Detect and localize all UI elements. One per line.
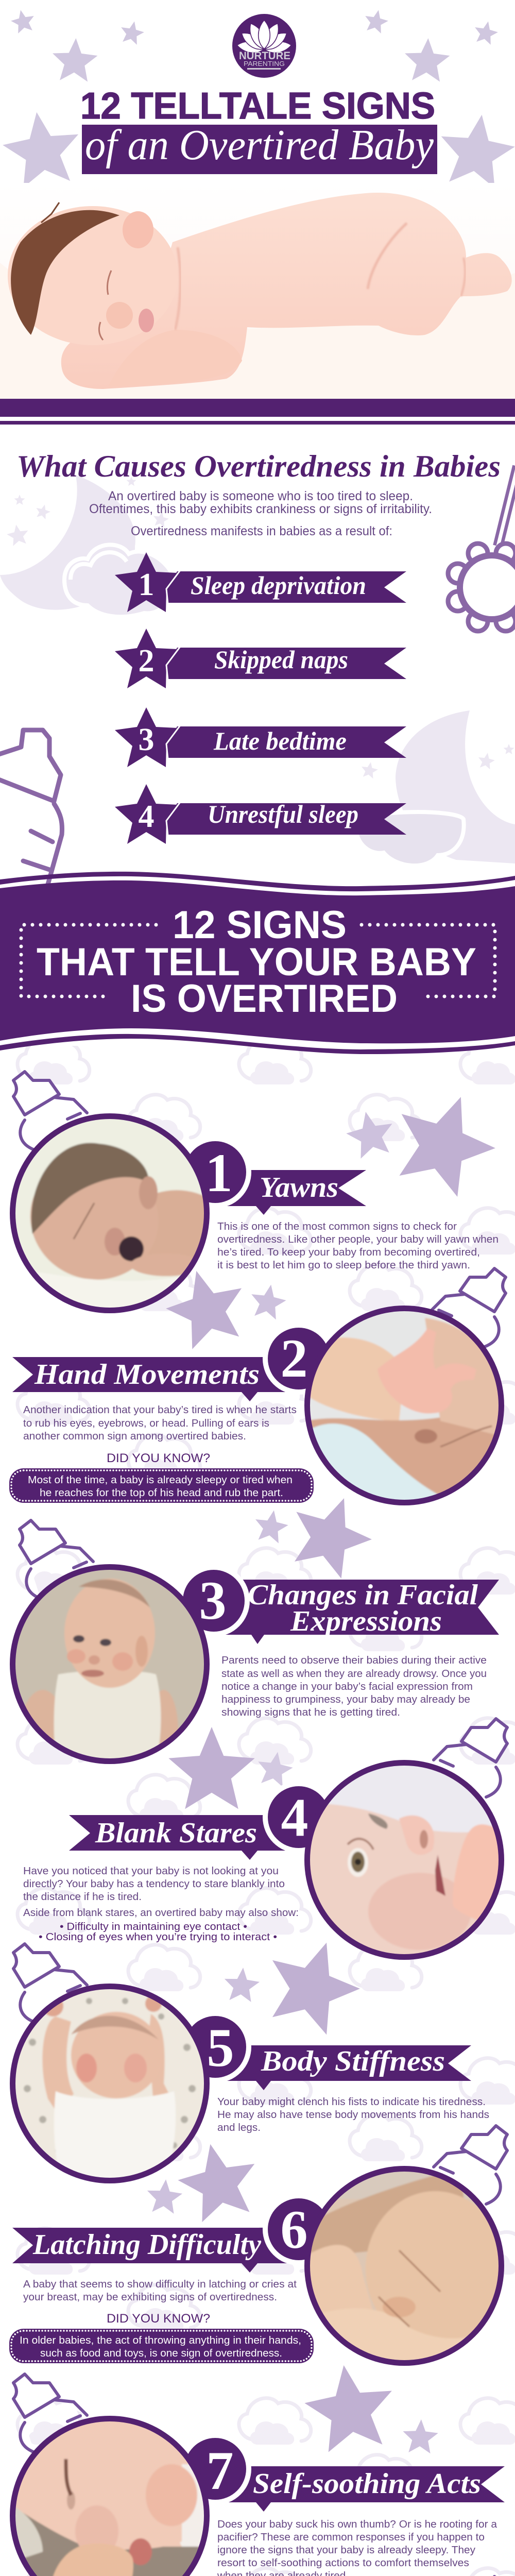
stars	[168, 1727, 370, 2040]
hero photo: sleeping baby	[0, 183, 515, 399]
heading: Hand Movements	[34, 1359, 260, 1391]
body text: notice a change in your baby’s facial expression from	[221, 1681, 473, 1692]
body text: Your baby might clench his fists to indicate his tiredness.	[217, 2096, 486, 2108]
body text: the distance if he is tired.	[23, 1891, 142, 1903]
photo: grumpy baby	[10, 1564, 210, 1783]
number: 5	[207, 2018, 234, 2078]
number: 3	[199, 1570, 227, 1631]
callout: did you know	[9, 1468, 314, 1503]
number badge	[183, 1570, 245, 1632]
cause 2: skipped naps: 2	[138, 643, 154, 679]
body text: Another indication that your baby’s tired is when he starts	[23, 1404, 297, 1416]
heading: Latching Difficulty	[32, 2229, 262, 2261]
stars	[145, 2136, 264, 2225]
body text: Does your baby suck his own thumb? Or is he rooting for a	[217, 2519, 497, 2530]
body text: Have you noticed that your baby is not looking at you	[23, 1866, 279, 1877]
panel: sign 2 hand movements	[9, 1268, 506, 1505]
body text: • Closing of eyes when you’re trying to interact •	[39, 1931, 277, 1943]
intro text: Overtiredness manifests in babies as a result of:	[131, 524, 392, 538]
callout: did you know: such as food and toys, is one sign of overtiredness.	[40, 2348, 282, 2359]
number badge	[184, 2438, 246, 2500]
callout: did you know: he reaches for the top of his head and rub the part.	[40, 1487, 283, 1499]
header stars	[0, 8, 515, 190]
body text	[221, 1655, 487, 1718]
body text: resort to self-soothing actions to comfort themselves	[217, 2557, 469, 2569]
logo: Nurture Parenting: PARENTING	[244, 60, 285, 67]
cause 3: late bedtime	[115, 707, 406, 767]
heading: Blank Stares	[95, 1817, 257, 1849]
icon: bottle	[432, 1268, 506, 1347]
cause 2: skipped naps: Skipped naps	[214, 645, 348, 674]
panel: header	[0, 8, 515, 425]
number: 4	[281, 1787, 308, 1848]
cause 4: unrestful sleep: 4	[138, 799, 154, 834]
body text: to rub his eyes, eyebrows, or head. Pulling of ears is	[23, 1418, 269, 1429]
heading: Yawns	[260, 1172, 338, 1204]
icon: bottle	[13, 1944, 87, 2022]
body text: He may also have tense body movements from his hands	[217, 2109, 489, 2121]
panel: sign 6 latching difficulty	[9, 2126, 507, 2366]
photo: nursing baby	[304, 2166, 505, 2366]
icon: bottle	[20, 1520, 93, 1599]
logo: Nurture Parenting	[232, 14, 296, 78]
number badge	[268, 1328, 330, 1389]
body text: This is one of the most common signs to check for	[217, 1221, 457, 1232]
callout: did you know: In older babies, the act of throwing anything in their hands,	[20, 2335, 301, 2346]
number badge	[268, 2198, 330, 2260]
body text: your breast, may be exhibiting signs of overtiredness.	[23, 2292, 277, 2303]
photo: stretching baby	[10, 1984, 210, 2183]
ribbon	[221, 2466, 505, 2512]
cause 3: late bedtime: Late bedtime	[213, 726, 347, 755]
body text: Parents need to observe their babies during their active	[221, 1655, 487, 1666]
heading: Expressions	[290, 1605, 442, 1637]
body text	[217, 2096, 489, 2133]
icon: bottle	[13, 2374, 87, 2452]
body text: overtiredness. Like other people, your baby will yawn when	[217, 1234, 499, 1245]
banner heading: IS OVERTIRED	[131, 977, 398, 1021]
number: 7	[206, 2441, 234, 2501]
number: 1	[205, 1143, 233, 1203]
did you know label: DID YOU KNOW?	[107, 1451, 210, 1465]
decoration: rattle right	[448, 466, 515, 631]
body text	[217, 1221, 499, 1271]
decoration: bottle left	[0, 730, 62, 886]
photo: baby sucking thumb	[10, 2416, 210, 2576]
body text	[217, 2519, 497, 2576]
did you know label: DID YOU KNOW?	[107, 2312, 210, 2326]
number: 6	[280, 2199, 308, 2260]
number badge	[268, 1786, 330, 1848]
body text: ignore the signs that your baby is already sleepy. They	[217, 2545, 475, 2556]
body text: state as well as when they are already drowsy. Once you	[221, 1668, 487, 1680]
ribbon	[221, 1170, 366, 1215]
body text	[23, 1404, 297, 1442]
title line 1: 12 TELLTALE SIGNS	[80, 86, 435, 127]
heading: Changes in Facial	[248, 1579, 478, 1611]
heading	[248, 1579, 478, 1637]
body text: directly? Your baby has a tendency to stare blankly into	[23, 1878, 285, 1890]
body text: A baby that seems to show difficulty in latching or cries at	[23, 2279, 297, 2290]
logo: Nurture Parenting: NURTURE	[239, 50, 290, 62]
background cloud pattern	[0, 1046, 515, 2576]
body text: he’s tired. To keep your baby from becoming overtired,	[217, 1247, 480, 1258]
panel: sign 1 yawns	[10, 1072, 508, 1353]
cause 1: sleep deprivation: Sleep deprivation	[191, 571, 366, 600]
photo: baby rubbing eyes	[304, 1306, 504, 1505]
stars	[159, 1080, 508, 1353]
panel: sign 3 facial expressions	[10, 1484, 499, 1783]
intro text: Oftentimes, this baby exhibits crankiness or signs of irritability.	[89, 502, 432, 516]
cause 4: unrestful sleep	[115, 784, 406, 844]
dotted frame	[21, 925, 495, 996]
number badge	[184, 1141, 246, 1203]
banner heading: 12 SIGNS	[173, 903, 347, 947]
body text: it is best to let him go to sleep before the third yawn.	[217, 1260, 470, 1271]
stars	[126, 2359, 439, 2576]
section heading: What Causes Overtiredness in Babies	[16, 449, 501, 483]
ribbon	[221, 2045, 471, 2090]
ribbon	[69, 1815, 288, 1860]
panel: sign 7 self-soothing acts	[10, 2359, 505, 2576]
cause 3: late bedtime: 3	[138, 722, 154, 757]
ribbon	[12, 1357, 288, 1401]
cause 4: unrestful sleep: Unrestful sleep	[208, 800, 358, 828]
body text	[23, 2279, 297, 2303]
icon: bottle	[434, 2126, 507, 2204]
intro text: An overtired baby is someone who is too tired to sleep.	[108, 489, 413, 503]
cause 1: sleep deprivation: 1	[138, 567, 154, 602]
body text: pacifier? These are common responses if you happen to	[217, 2532, 485, 2543]
body text: and legs.	[217, 2122, 261, 2133]
cause 1: sleep deprivation	[115, 552, 406, 612]
number: 2	[280, 1328, 308, 1388]
panel: causes of overtiredness	[0, 449, 515, 886]
cause 2: skipped naps	[115, 629, 406, 688]
callout: did you know: Most of the time, a baby is already sleepy or tired when	[28, 1475, 293, 1486]
heading: Self-soothing Acts	[253, 2468, 481, 2500]
body text: • Difficulty in maintaining eye contact •	[60, 1921, 247, 1933]
photo: yawning baby	[10, 1113, 228, 1313]
intro text	[89, 489, 432, 538]
panel: 12 signs wave banner	[0, 872, 515, 1054]
body text: another common sign among overtired babies.	[23, 1431, 246, 1442]
title banner: of an Overtired Baby	[85, 121, 434, 169]
wave shape	[0, 872, 515, 1054]
ribbon	[221, 1580, 499, 1644]
banner heading	[37, 903, 476, 1021]
double rule under hero	[0, 399, 515, 425]
ribbon	[12, 2228, 288, 2273]
decoration: moon and cloud left	[0, 475, 174, 617]
icon: bottle	[13, 1072, 87, 1150]
decoration: moon and cloud right	[355, 710, 515, 866]
body text: Aside from blank stares, an overtired baby may also show:	[23, 1907, 299, 1919]
heading: Body Stiffness	[261, 2045, 445, 2077]
panel: sign 5 body stiffness	[10, 1944, 489, 2225]
stars	[252, 1484, 382, 1584]
panel: sign 4 blank stares	[23, 1719, 507, 2040]
body text: showing signs that he is getting tired.	[221, 1707, 400, 1718]
body text: happiness to grumpiness, your baby may already be	[221, 1694, 470, 1705]
banner heading: THAT TELL YOUR BABY	[37, 940, 476, 984]
number badge	[184, 2016, 246, 2078]
body text	[23, 1866, 299, 1943]
icon: bottle	[434, 1719, 507, 1797]
photo: baby staring	[304, 1760, 504, 1960]
callout: did you know	[9, 2329, 314, 2363]
